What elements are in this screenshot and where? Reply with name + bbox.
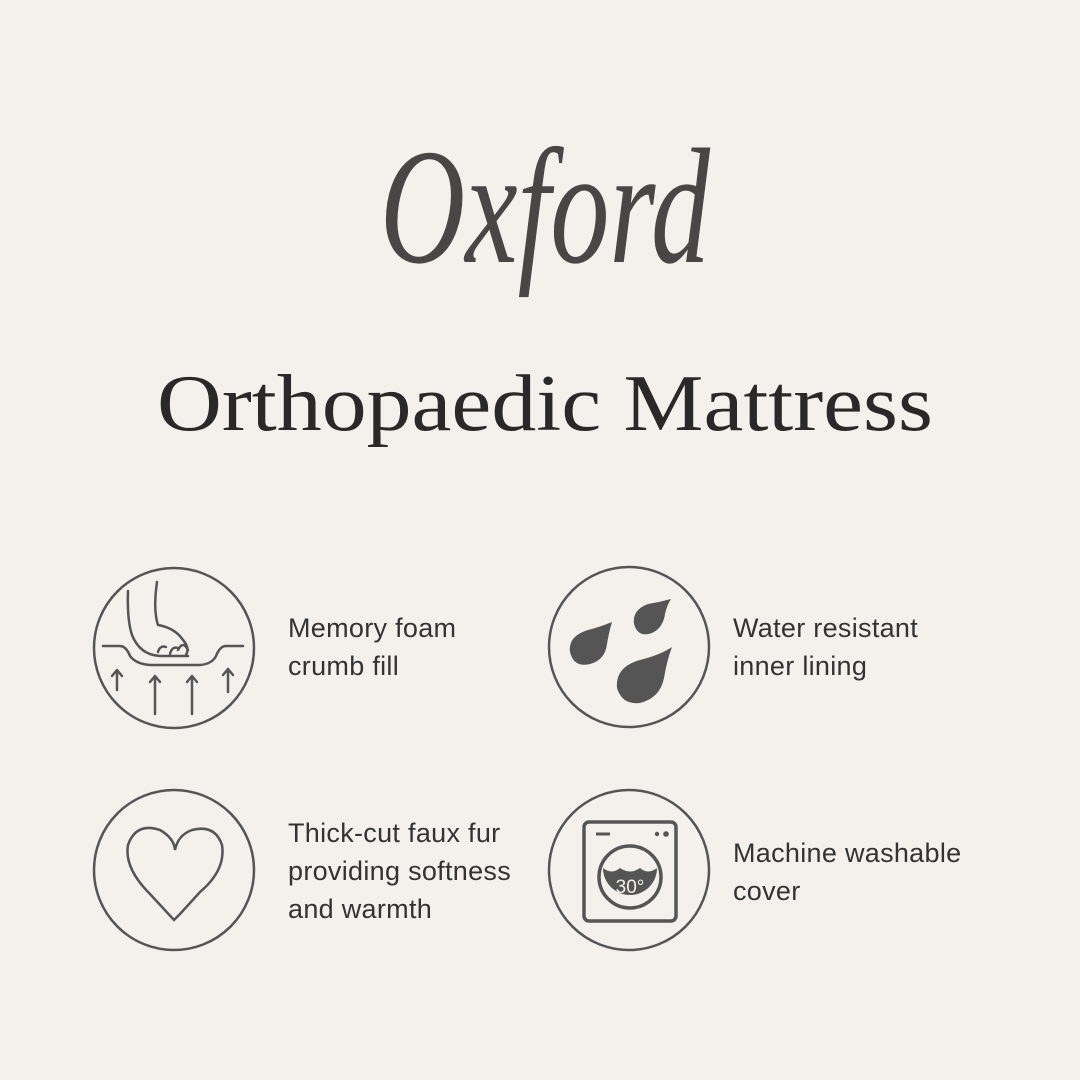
text: machine washable: cover [733,876,801,906]
text: faux fur [288,818,511,924]
heading: Orthopaedic Mattress: Orthopaedic Mattress [157,360,933,448]
text: memory foam: Memory foam [288,613,456,643]
icon: water drops [549,567,709,727]
text: faux fur: Thick-cut faux fur [288,818,500,848]
text: memory foam [288,613,456,681]
title: Oxford script: Oxford [380,115,711,299]
text: water resistant: Water resistant [733,613,918,643]
icon: memory foam [94,568,254,728]
icon: heart [94,790,254,950]
text: machine washable: Machine washable [733,838,961,868]
icon: washing machine [549,790,709,950]
text: faux fur: providing softness [288,856,511,886]
text: water resistant [733,613,918,681]
text: memory foam: crumb fill [288,651,399,681]
text: water resistant: inner lining [733,651,867,681]
text: machine washable [733,838,961,906]
text: faux fur: and warmth [288,894,432,924]
icon: washing machine: 30° [616,877,644,898]
